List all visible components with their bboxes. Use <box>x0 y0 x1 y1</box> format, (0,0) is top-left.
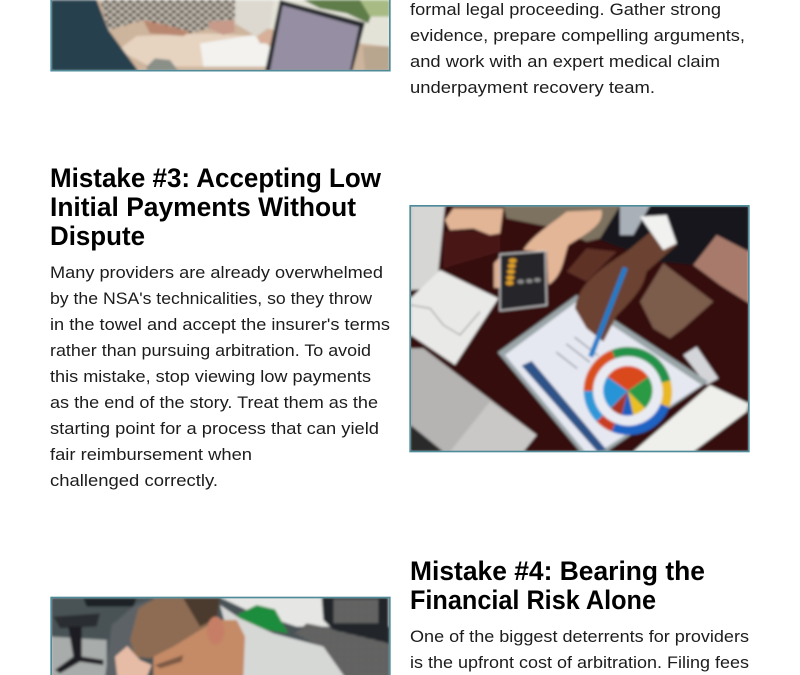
paragraph: mistake 3 description: in the towel and accept the insurer's terms <box>50 315 390 334</box>
paragraph: closing text of mistake 2: formal legal proceeding. Gather strong <box>410 0 721 19</box>
heading: mistake 3 <box>50 163 381 251</box>
paragraph: mistake 3 description: by the NSA's technicalities, so they throw <box>50 289 373 308</box>
paragraph: closing text of mistake 2: underpayment recovery team. <box>410 78 655 97</box>
heading: mistake 3: Initial Payments Without <box>50 192 356 222</box>
paragraph: mistake 4 description: One of the biggest deterrents for providers <box>410 627 749 646</box>
paragraph: mistake 3 description: fair reimbursement when <box>50 445 252 464</box>
paragraph: closing text of mistake 2 <box>410 0 745 97</box>
paragraph: mistake 3 description: challenged correctly. <box>50 471 218 490</box>
paragraph: mistake 3 description: this mistake, stop viewing low payments <box>50 367 371 386</box>
paragraph: mistake 4 description: is the upfront cost of arbitration. Filing fees <box>410 653 749 672</box>
heading: mistake 3: Mistake #3: Accepting Low <box>50 163 381 193</box>
paragraph: closing text of mistake 2: and work with an expert medical claim <box>410 52 720 71</box>
paragraph: mistake 3 description <box>50 263 390 490</box>
heading: mistake 3: Dispute <box>50 221 145 251</box>
photo: hands with calculator and pie chart report on desk <box>410 206 749 452</box>
paragraph: mistake 4 description <box>410 627 749 672</box>
heading: mistake 4: Mistake #4: Bearing the <box>410 556 705 586</box>
paragraph: mistake 3 description: Many providers are already overwhelmed <box>50 263 383 282</box>
heading: mistake 4 <box>410 556 705 615</box>
photo: people reviewing documents at a table with a laptop <box>51 0 390 71</box>
paragraph: mistake 3 description: starting point for a process that can yield <box>50 419 379 438</box>
photo: stressed man holding his head in an office <box>51 597 390 675</box>
paragraph: closing text of mistake 2: evidence, prepare compelling arguments, <box>410 26 745 45</box>
heading: mistake 4: Financial Risk Alone <box>410 585 656 615</box>
paragraph: mistake 3 description: rather than pursuing arbitration. To avoid <box>50 341 371 360</box>
paragraph: mistake 3 description: as the end of the story. Treat them as the <box>50 393 378 412</box>
